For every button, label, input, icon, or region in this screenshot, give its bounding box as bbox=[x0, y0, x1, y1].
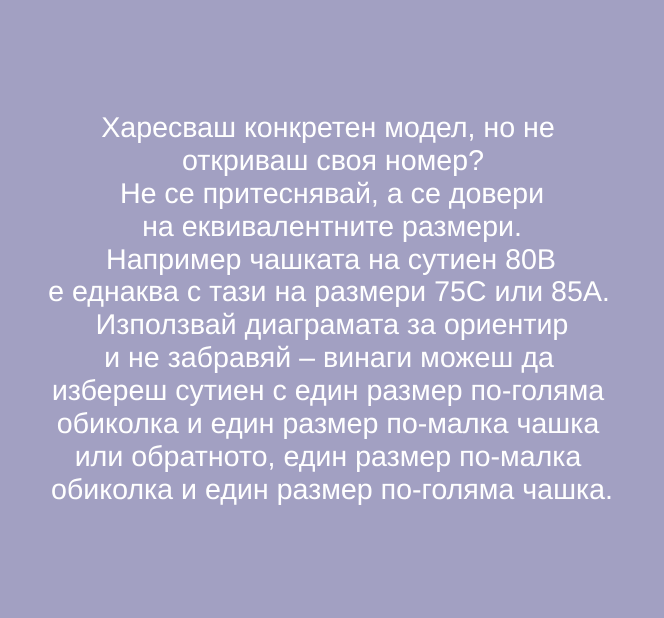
text block: bra size advice bbox=[48, 112, 613, 506]
text block: bra size advice: на еквивалентните размери. bbox=[142, 211, 522, 243]
text block: bra size advice: обиколка и един размер по-малка чашка bbox=[57, 408, 599, 440]
text block: bra size advice: откриваш своя номер? bbox=[182, 145, 484, 177]
text block: bra size advice: е еднаква с тази на размери 75С или 85А. bbox=[48, 276, 610, 308]
text block: bra size advice: Харесваш конкретен модел, но не bbox=[101, 112, 555, 144]
text block: bra size advice: избереш сутиен с един размер по-голяма bbox=[52, 375, 604, 407]
text block: bra size advice: Не се притеснявай, а се довери bbox=[120, 178, 544, 210]
text block: bra size advice: или обратното, един размер по-малка bbox=[75, 441, 581, 473]
text block: bra size advice: Използвай диаграмата за ориентир bbox=[96, 309, 568, 341]
text block: bra size advice: и не забравяй – винаги можеш да bbox=[104, 342, 554, 374]
text block: bra size advice: Например чашката на сутиен 80В bbox=[106, 244, 556, 276]
text block: bra size advice: обиколка и един размер по-голяма чашка. bbox=[51, 474, 613, 506]
